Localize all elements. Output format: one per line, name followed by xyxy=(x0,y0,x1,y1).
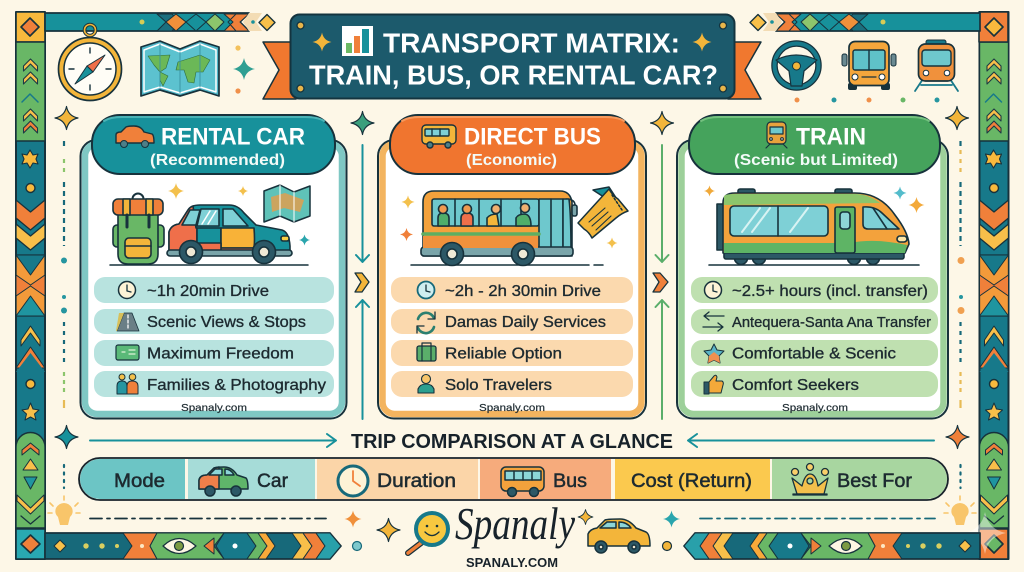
arrow: comparison right xyxy=(688,434,934,447)
arrow: comparison left xyxy=(90,434,336,447)
title ribbon right xyxy=(728,42,761,99)
row: comfort seekers: Comfort Seekers xyxy=(732,377,859,394)
title banner: TRAIN, BUS, OR RENTAL CAR? xyxy=(309,60,718,90)
header: train: (Scenic but Limited) xyxy=(734,152,898,169)
logo: spanaly xyxy=(377,499,650,570)
label: mode: Mode xyxy=(114,471,165,492)
label: bus: Bus xyxy=(553,471,587,492)
icon: small bus xyxy=(422,125,456,148)
row: bus drive time xyxy=(391,277,633,303)
caption: spanaly: Spanaly.com xyxy=(479,402,545,414)
comparison bar xyxy=(79,458,948,500)
row: reliable option xyxy=(391,340,633,366)
header: direct bus: (Economic) xyxy=(466,152,557,169)
header: train xyxy=(689,115,940,174)
icon: backpack xyxy=(113,194,164,264)
icon: bar clock xyxy=(338,466,368,496)
bottom left border band xyxy=(45,533,341,559)
label: duration: Duration xyxy=(377,471,456,492)
icon: bar bus xyxy=(501,467,544,496)
panel: direct bus xyxy=(378,115,646,418)
icon: bar car xyxy=(199,467,248,496)
panel: rental car xyxy=(80,115,346,418)
row: solo travelers: Solo Travelers xyxy=(445,377,552,394)
row: transfer: Antequera-Santa Ana Transfer xyxy=(732,314,931,331)
row: drive time: ~1h 20min Drive xyxy=(147,283,269,300)
icon: ticket xyxy=(578,187,628,238)
header: rental car: (Recommended) xyxy=(150,152,285,169)
bottom right border band xyxy=(684,533,980,559)
decoration: top sparkles and dots xyxy=(233,45,940,102)
top right border band xyxy=(750,13,980,31)
row: comfortable and scenic xyxy=(691,340,938,366)
row: comfortable and scenic: Comfortable & Scenic xyxy=(732,346,896,362)
row: drive time xyxy=(94,277,334,303)
icon: compass xyxy=(58,24,122,100)
icon: best for people xyxy=(792,464,828,495)
icon: car xyxy=(167,205,292,264)
top left border band xyxy=(45,13,275,31)
row: reliable option: Reliable Option xyxy=(445,346,562,362)
caption: spanaly: Spanaly.com xyxy=(181,402,247,414)
title ribbon left xyxy=(263,42,296,99)
icon: small car xyxy=(116,126,154,148)
decoration: sparkles xyxy=(55,106,969,448)
label: cost: Cost (Return) xyxy=(631,471,752,492)
heading: trip comparison: TRIP COMPARISON AT A GLANCE xyxy=(351,431,673,453)
row: comfort seekers xyxy=(691,371,938,397)
row: families and photography: Families & Photography xyxy=(147,377,326,394)
icon: bus xyxy=(421,191,577,266)
left border column xyxy=(16,12,45,559)
icon: front bus xyxy=(842,42,896,90)
title banner xyxy=(290,14,734,98)
row: train duration: ~2.5+ hours (incl. transfer) xyxy=(732,283,928,300)
row: bus drive time: ~2h - 2h 30min Drive xyxy=(445,283,601,300)
header: rental car xyxy=(92,115,335,174)
caption: spanaly: Spanaly.com xyxy=(782,402,848,414)
arrows: between bus and train panels xyxy=(653,145,668,419)
decoration: footer dashes and bulbs xyxy=(48,496,976,550)
right border column xyxy=(964,12,1008,559)
panel: train xyxy=(677,115,948,418)
header: train: TRAIN xyxy=(796,124,866,150)
decoration: right dotted guide xyxy=(958,141,964,488)
row: daily services: Damas Daily Services xyxy=(445,314,606,331)
row: scenic views xyxy=(94,309,334,334)
icon: small train xyxy=(766,122,787,148)
row: daily services xyxy=(391,309,633,334)
label: best for: Best For xyxy=(837,471,913,492)
logo url: SPANALY.COM xyxy=(466,555,558,570)
illustration: bus and ticket xyxy=(400,187,628,266)
row: maximum freedom: Maximum Freedom xyxy=(147,346,294,362)
row: solo travelers xyxy=(391,371,633,397)
row: families and photography xyxy=(94,371,334,397)
row: scenic views: Scenic Views & Stops xyxy=(147,314,306,331)
illustration: backpack and car xyxy=(110,183,310,265)
illustration: train xyxy=(704,186,924,265)
title text: TRANSPORT MATRIX: xyxy=(383,28,680,58)
arrows: between car and bus panels xyxy=(355,145,369,419)
icon: bar chart xyxy=(342,26,373,56)
decoration: left dotted guide xyxy=(61,141,67,488)
icon: yellow car xyxy=(588,519,650,553)
row: maximum freedom xyxy=(94,340,334,366)
label: car: Car xyxy=(257,471,289,492)
icon: steering wheel xyxy=(774,44,818,88)
header: direct bus: DIRECT BUS xyxy=(464,124,601,150)
wordmark: Spanaly xyxy=(455,499,575,549)
icon: folded map xyxy=(264,185,310,222)
header: direct bus xyxy=(390,115,635,174)
icon: magnifier with smile xyxy=(408,513,448,553)
icon: front train xyxy=(915,40,958,91)
header: rental car: RENTAL CAR xyxy=(161,124,305,150)
row: transfer xyxy=(691,309,938,334)
icon: world map xyxy=(141,41,219,96)
row: train duration xyxy=(691,277,938,303)
